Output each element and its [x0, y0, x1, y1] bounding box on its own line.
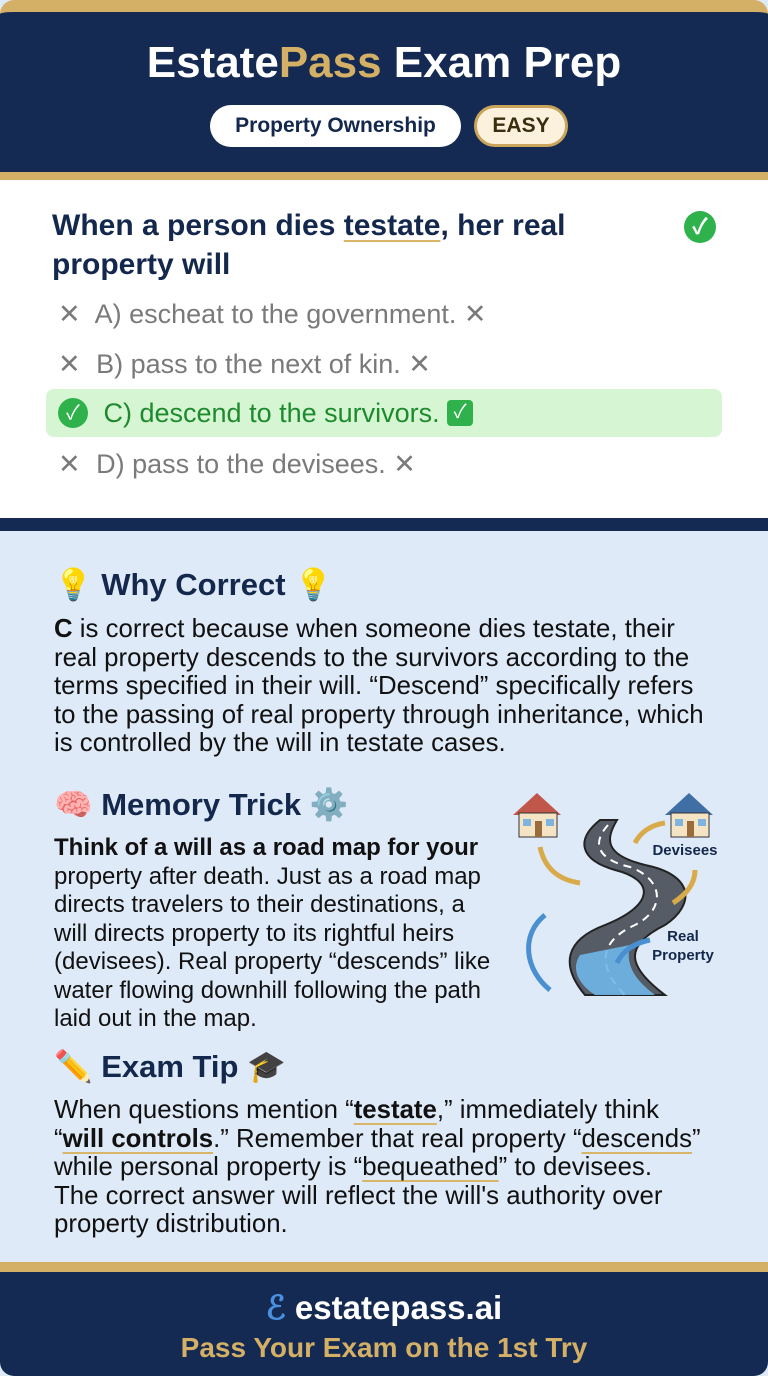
question panel — [0, 180, 768, 518]
icon: check: ✓ — [692, 214, 708, 239]
road — [570, 820, 685, 995]
question text: When a person dies testate, her real property will — [52, 209, 566, 281]
option C correct: C) descend to the survivors. — [104, 398, 440, 428]
heading: exam tip: ✏️ Exam Tip 🎓 — [54, 1049, 286, 1084]
header — [0, 0, 768, 180]
illustration: road map: Real — [667, 928, 699, 945]
labels: Devisees — [652, 842, 718, 859]
option A: ✕ A) escheat to the government. ✕ — [58, 299, 486, 329]
text: memory trick: Think of a will as a road map for your property after death. Just as a road map directs travelers to their destinations, a will directs property to its rightful heirs (devisees). Real property “descends” like water flowing downhill following the path laid out in the map. — [54, 834, 490, 1032]
badge: topic — [210, 105, 461, 147]
illustration: road map: Property — [652, 947, 714, 964]
option C correct: ✓ — [454, 402, 467, 423]
option D: ✕ D) pass to the devisees. ✕ — [58, 449, 416, 479]
badge: difficulty — [474, 105, 568, 147]
tagline: Pass Your Exam on the 1st Try — [181, 1332, 587, 1363]
icon: house left — [513, 793, 561, 837]
option B: ✕ B) pass to the next of kin. ✕ — [58, 349, 431, 379]
logo: ℰ estatepass.ai — [266, 1289, 502, 1326]
arrows — [540, 847, 580, 883]
badge: difficulty: EASY — [492, 114, 550, 137]
heading: why correct: 💡 Why Correct 💡 — [54, 567, 333, 602]
title: EstatePass Exam Prep — [147, 38, 621, 87]
heading: memory trick: 🧠 Memory Trick ⚙️ — [54, 787, 348, 822]
badge: topic: Property Ownership — [235, 114, 436, 137]
footer — [0, 1262, 768, 1376]
option C correct — [46, 389, 722, 437]
text: exam tip: When questions mention “testate,” immediately think “will controls.” Remember that real property “descends” while personal property is “bequeathed” to devisees. The correct answer will reflect the will's authority over property distribution. — [54, 1096, 701, 1238]
icon: check — [684, 211, 716, 243]
illustration: road map — [513, 793, 718, 996]
icon: house right — [665, 793, 713, 837]
option C correct: ✓ — [66, 402, 80, 424]
text: why correct: C is correct because when someone dies testate, their real property descends to the survivors according to the terms specified in their will. “Descend” specifically refers to the passing of real property through inheritance, which is controlled by the will in testate cases. — [54, 615, 704, 757]
